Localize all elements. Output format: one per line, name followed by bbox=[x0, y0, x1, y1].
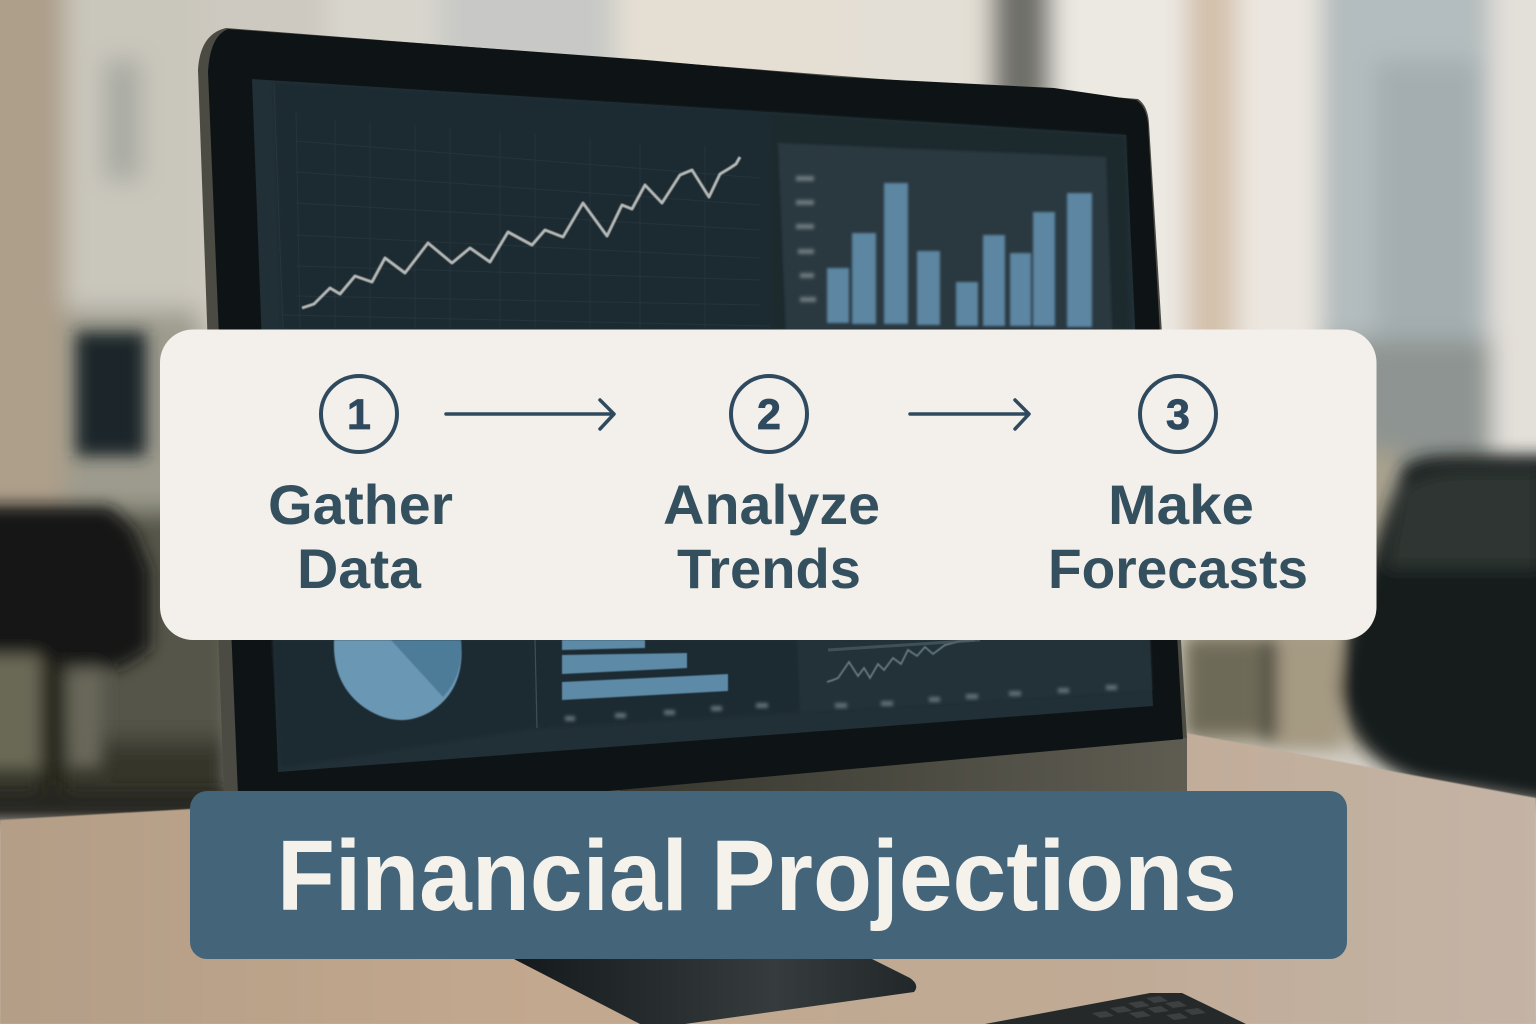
bar chart axis labels bbox=[796, 176, 816, 302]
top band above bar chart bbox=[770, 112, 1130, 330]
panel divider bbox=[535, 640, 537, 728]
arrow 1 to 2 bbox=[446, 400, 614, 429]
bar chart bbox=[827, 183, 1092, 327]
banner background bbox=[190, 791, 1347, 959]
step 2 label bbox=[663, 473, 880, 600]
desktop monitor bbox=[198, 28, 1187, 795]
keyboard bbox=[985, 993, 1246, 1024]
step 3 number badge bbox=[1140, 376, 1216, 452]
title: Financial bbox=[277, 820, 688, 932]
step 3 number badge: 3 bbox=[1166, 391, 1190, 439]
screen bbox=[252, 79, 1153, 772]
pie panel bbox=[272, 640, 536, 768]
grid lines bbox=[274, 84, 770, 328]
step 1 bbox=[268, 376, 453, 600]
horizontal bar axis labels bbox=[565, 703, 768, 721]
step 2 number badge bbox=[731, 376, 807, 452]
monitor silver frame bbox=[198, 28, 1187, 795]
process panel bbox=[160, 330, 1376, 640]
step 1 number badge bbox=[321, 376, 397, 452]
title: Projections bbox=[711, 820, 1237, 932]
step 3 label bbox=[1048, 473, 1308, 600]
office chair bbox=[1340, 455, 1536, 805]
monitor chin bbox=[620, 738, 1187, 795]
monitor stand bbox=[512, 958, 916, 1024]
pie chart bbox=[334, 640, 462, 720]
title bbox=[277, 820, 1237, 932]
step 2 label: Trends bbox=[677, 537, 861, 600]
step 3 label: Forecasts bbox=[1048, 537, 1308, 600]
dark monitor in distance bbox=[76, 332, 146, 456]
step 2 bbox=[663, 376, 880, 600]
horizontal bar chart bbox=[562, 640, 728, 700]
title banner bbox=[190, 791, 1347, 959]
rising line chart bbox=[302, 157, 740, 308]
step 2 label: Analyze bbox=[663, 473, 880, 536]
step 2 number badge: 2 bbox=[757, 391, 781, 439]
step 1 label bbox=[268, 473, 453, 600]
lower line chart bbox=[827, 640, 975, 682]
step 1 label: Gather bbox=[268, 473, 453, 536]
step 1 label: Data bbox=[297, 537, 422, 600]
bar chart panel bbox=[778, 143, 1112, 330]
arrow 2 to 3 bbox=[910, 400, 1029, 429]
step 3 label: Make bbox=[1108, 473, 1254, 536]
panel background bbox=[160, 330, 1376, 640]
table surface bbox=[0, 733, 1536, 1024]
table legs in distance bbox=[38, 660, 66, 790]
lower chart axis line bbox=[828, 640, 980, 650]
lower centre panel bbox=[530, 640, 800, 728]
lower line chart panel bbox=[797, 640, 1152, 712]
background furniture strips bbox=[1187, 640, 1262, 735]
step 1 number badge: 1 bbox=[347, 391, 371, 439]
left chart panel bbox=[274, 82, 772, 330]
monitor bezel bbox=[208, 29, 1183, 795]
step 3 bbox=[1048, 376, 1308, 600]
lower chart axis labels bbox=[835, 685, 1117, 708]
